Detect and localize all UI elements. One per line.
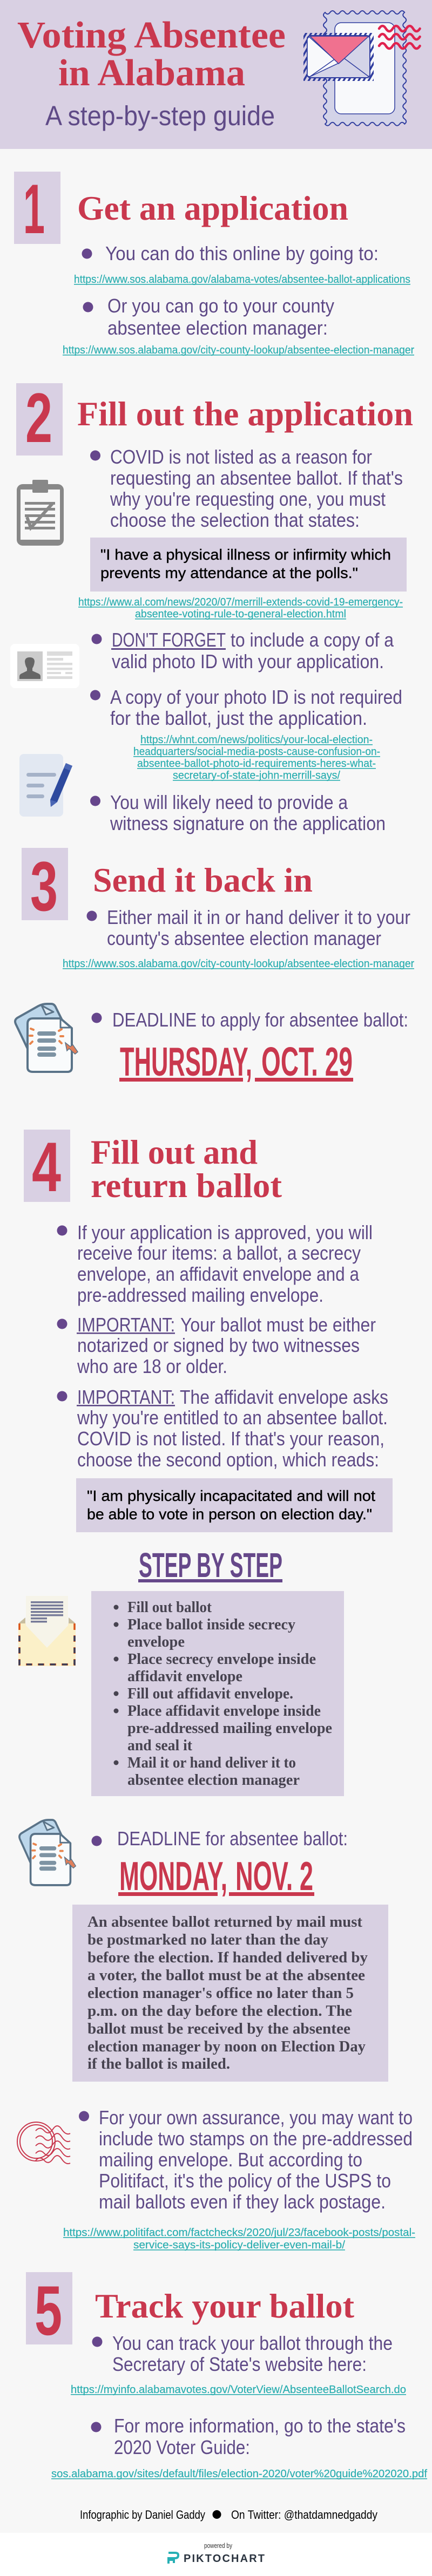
deadline date: thursday oct 29: OCT. 29: [261, 1039, 353, 1084]
bullet: ballot deadline: DEADLINE for absentee ballot:: [117, 1827, 348, 1850]
panel: deadline details: election manager by noon on Election Day: [87, 2038, 366, 2055]
bullet: affidavit envelope: [57, 1386, 388, 1471]
link: politifact: https://www.politifact.com/factchecks/2020/jul/23/facebook-posts/postal-: [63, 2227, 415, 2239]
bullet: track online: [92, 2332, 393, 2375]
bullet: four items: pre-addressed mailing envelope.: [77, 1284, 323, 1306]
heading: fill out the application: Fill out the application: [77, 395, 413, 433]
icon: photo id: [10, 644, 79, 688]
bullet: stamps assurance: mailing envelope. But according to: [99, 2149, 362, 2171]
bullet: voter guide: [91, 2415, 406, 2458]
panel: step by step list: affidavit envelope: [127, 1668, 242, 1685]
bullet: covid reason: requesting an absentee ballot. If that's: [110, 467, 403, 489]
bullet: affidavit envelope: IMPORTANT:: [77, 1386, 175, 1408]
icon: clipboard: [17, 480, 64, 546]
link: absentee ballot applications: https://www.sos.alabama.gov/alabama-votes/absentee-ballot-applications: [74, 274, 410, 286]
bullet: affidavit envelope: choose the second option, which reads:: [77, 1449, 379, 1471]
bullet: track online: You can track your ballot through the: [112, 2332, 393, 2354]
step number 1: 1: [23, 169, 45, 248]
link: absentee ballot search: https://myinfo.alabamavotes.gov/VoterView/AbsenteeBallotSearch.do: [71, 2384, 406, 2396]
callout: illness quote: prevents my attendance at the polls.": [100, 565, 358, 581]
callout: illness quote: "I have a physical illness or infirmity which: [100, 546, 391, 563]
link: whnt: absentee-ballot-photo-id-requirements-heres-what-: [137, 758, 376, 770]
panel: deadline details: a voter, the ballot must be at the absentee: [87, 1967, 365, 1984]
panel: deadline details: before the election. If handed delivered by: [87, 1949, 368, 1966]
panel: step by step list: pre-addressed mailing envelope: [127, 1719, 332, 1737]
bullet: witness signature: [90, 791, 386, 834]
bullet: four items: receive four items: a ballot, a secrecy: [77, 1242, 361, 1264]
bullet: online: You can do this online by going to:: [105, 242, 379, 264]
bullet: notarized: [57, 1314, 376, 1377]
footer: powered by piktochart: [0, 2533, 432, 2576]
panel: deadline details: be postmarked no later than the day: [87, 1931, 328, 1948]
bullet: covid reason: [90, 446, 403, 531]
panel: step by step list: Mail it or hand deliver it to: [127, 1754, 296, 1771]
bullet: mail or deliver: [86, 906, 410, 949]
footer: powered by piktochart: PIKTOCHART: [184, 2553, 265, 2565]
deadline date: monday nov 2: MONDAY,: [119, 1853, 227, 1899]
link: whnt: [133, 734, 380, 781]
link: al.com: absentee-voting-rule-to-general-election.html: [135, 608, 346, 620]
credits: [80, 2508, 377, 2521]
link: voter guide pdf: sos.alabama.gov/sites/default/files/election-2020/voter%20guide%202020.pdf: [51, 2468, 427, 2480]
panel: header: [0, 0, 432, 149]
panel: step by step list: Place affidavit envelope inside: [127, 1702, 321, 1719]
bullet: covid reason: why you're requesting one, you must: [110, 488, 386, 510]
bullet: notarized: who are 18 or older.: [77, 1355, 227, 1377]
panel: step by step list: Place secrecy envelope inside: [127, 1650, 316, 1668]
panel: step 4: [17, 1127, 415, 2251]
bullet: voter guide: For more information, go to the state's: [114, 2415, 406, 2437]
footer: powered by piktochart: powered by: [204, 2541, 232, 2550]
callout: incapacitated quote: "I am physically incapacitated and will not: [87, 1487, 375, 1504]
heading: get an application: Get an application: [77, 189, 348, 227]
panel: deadline details: An absentee ballot returned by mail must: [87, 1913, 362, 1931]
link: whnt: https://whnt.com/news/politics/your-local-election-: [140, 734, 373, 746]
bullet: affidavit envelope: The affidavit envelope asks: [180, 1386, 388, 1408]
panel: step 3: [15, 847, 414, 1084]
bullet: stamps assurance: mail ballots even if they lack postage.: [99, 2191, 386, 2213]
panel: step by step list: [91, 1591, 344, 1796]
bullet: stamps assurance: [79, 2106, 413, 2213]
bullet: don't forget: [92, 629, 394, 672]
title: Voting Absentee: [17, 15, 286, 56]
heading: step by step: [138, 1546, 282, 1585]
icon: postmark: [17, 2122, 70, 2164]
heading: step by step: STEP BY STEP: [139, 1546, 282, 1585]
bullet: mail or deliver: county's absentee election manager: [107, 927, 381, 949]
bullet: id not required: A copy of your photo ID is not required: [110, 686, 402, 708]
step number 3: 3: [30, 847, 58, 926]
icon: documents with cursor: [19, 1820, 76, 1885]
bullet: affidavit envelope: why you're entitled to an absentee ballot.: [77, 1406, 388, 1429]
step number 2: 2: [25, 378, 52, 457]
link: politifact: service-says-its-policy-deliver-even-mail-b/: [133, 2239, 345, 2251]
bullet: voter guide: 2020 Voter Guide:: [114, 2436, 250, 2458]
link: absentee election manager: https://www.sos.alabama.gov/city-county-lookup/absentee-election-manager: [63, 958, 414, 970]
callout: incapacitated quote: be able to vote in person on election day.": [87, 1506, 372, 1523]
bullet: track online: Secretary of State's website here:: [112, 2353, 367, 2375]
bullet: stamps assurance: Politifact, it's the policy of the USPS to: [99, 2170, 391, 2192]
deadline date: monday nov 2: NOV. 2: [235, 1853, 313, 1899]
bullet: covid reason: COVID is not listed as a reason for: [110, 446, 372, 468]
bullet: don't forget: to include a copy of a: [231, 629, 394, 651]
panel: deadline details: p.m. on the day before the election. The: [87, 2002, 352, 2020]
link: whnt: secretary-of-state-john-merrill-says/: [173, 770, 340, 781]
link: politifact: [63, 2227, 415, 2251]
icon: piktochart logo: [168, 2553, 178, 2564]
bullet: don't forget: DON'T FORGET: [112, 629, 226, 651]
bullet: four items: [57, 1221, 373, 1306]
panel: step by step list: Fill out affidavit envelope.: [127, 1685, 293, 1702]
heading: fill out and return ballot: return ballot: [91, 1166, 282, 1205]
heading: fill out and return ballot: [91, 1133, 282, 1205]
panel: deadline details: election manager's office no later than 5: [87, 1984, 354, 2002]
bullet: affidavit envelope: COVID is not listed. If that's your reason,: [77, 1428, 384, 1450]
bullet: covid reason: choose the selection that states:: [110, 509, 360, 531]
callout: incapacitated quote: [76, 1478, 393, 1532]
bullet: notarized: notarized or signed by two witnesses: [77, 1334, 360, 1356]
panel: step 2: [10, 378, 413, 834]
bullet: county manager: [83, 295, 334, 339]
step number 4: 4: [32, 1127, 61, 1206]
icon: open envelope with letter: [18, 1596, 76, 1666]
subtitle: A step-by-step guide: [45, 100, 275, 131]
panel: step by step list: absentee election manager: [127, 1771, 300, 1789]
credits: Infographic by Daniel Gaddy: [80, 2508, 205, 2521]
panel: step 5: [26, 2271, 427, 2480]
panel: step 1: [14, 169, 414, 356]
heading: track your ballot: Track your ballot: [95, 2287, 355, 2325]
bullet: witness signature: witness signature on the application: [110, 812, 386, 834]
panel: deadline details: [72, 1905, 388, 2082]
step number 5: 5: [35, 2271, 62, 2350]
title: [17, 15, 286, 94]
bullet: county manager: absentee election manager:: [107, 317, 328, 339]
heading: fill out and return ballot: Fill out and: [91, 1133, 258, 1171]
panel: deadline details: if the ballot is mailed.: [87, 2055, 230, 2072]
panel: step by step list: Place ballot inside secrecy: [127, 1616, 295, 1633]
bullet: don't forget: valid photo ID with your application.: [112, 650, 384, 672]
icon: stamp and envelope: [303, 11, 420, 126]
title: in Alabama: [58, 52, 245, 94]
credits: On Twitter: @thatdamnedgaddy: [231, 2508, 377, 2521]
link: absentee election manager: https://www.sos.alabama.gov/city-county-lookup/absentee-election-manager: [63, 344, 414, 356]
bullet: notarized: IMPORTANT:: [77, 1314, 175, 1336]
bullet: id not required: [90, 686, 402, 729]
bullet: notarized: Your ballot must be either: [180, 1314, 376, 1336]
bullet: four items: If your application is approved, you will: [77, 1221, 373, 1243]
link: al.com: [78, 596, 403, 620]
link: whnt: headquarters/social-media-posts-cause-confusion-on-: [133, 746, 380, 758]
panel: step by step list: Fill out ballot: [127, 1599, 212, 1616]
callout: illness quote: [90, 538, 407, 592]
bullet: id not required: for the ballot, just the application.: [110, 707, 367, 729]
panel: step by step list: and seal it: [127, 1737, 192, 1754]
bullet: four items: envelope, an affidavit envelope and a: [77, 1263, 360, 1285]
heading: send it back in: Send it back in: [93, 861, 313, 899]
panel: step by step list: envelope: [127, 1633, 185, 1650]
panel: deadline details: ballot must be received by the absentee: [87, 2020, 350, 2037]
bullet: county manager: Or you can go to your county: [107, 295, 334, 317]
bullet: witness signature: You will likely need to provide a: [110, 791, 348, 813]
icon: documents with cursor: [15, 1004, 78, 1072]
icon: notepad and pen: [19, 754, 72, 817]
link: al.com: https://www.al.com/news/2020/07/merrill-extends-covid-19-emergency-: [78, 596, 403, 608]
deadline date: thursday oct 29: THURSDAY,: [120, 1039, 252, 1084]
